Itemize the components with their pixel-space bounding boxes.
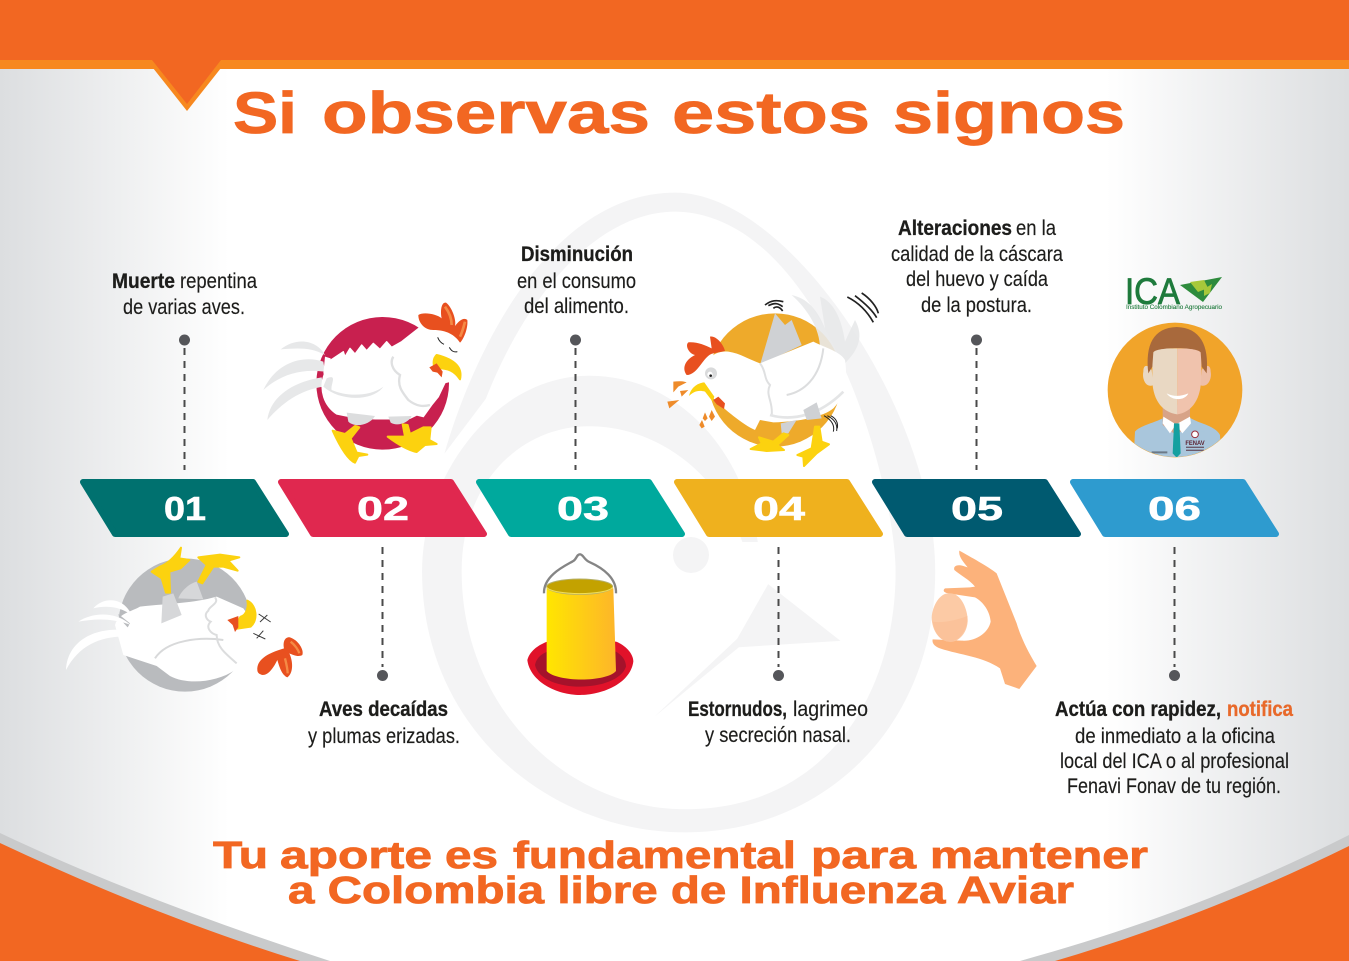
icon: hand holding egg	[932, 551, 1037, 689]
bottom right corner	[1020, 835, 1349, 961]
badge 05	[875, 482, 1078, 534]
step 06 text: Fenavi Fonav de tu región.	[1067, 775, 1281, 798]
badge 04: 04	[753, 490, 806, 527]
badge 02	[281, 482, 484, 534]
bottom left corner	[0, 833, 330, 961]
step 02 text: y plumas erizadas.	[308, 725, 460, 748]
closing message	[213, 835, 1148, 912]
badge 03: 03	[557, 490, 609, 527]
step 01 text: repentina	[180, 270, 257, 293]
step 05 text: de la postura.	[921, 294, 1032, 317]
closing message: mantener	[930, 835, 1148, 877]
step 04 text: y secreción nasal.	[705, 724, 851, 747]
badge 01: 01	[164, 490, 206, 527]
title: Si	[233, 81, 297, 146]
closing message: es	[445, 835, 498, 877]
step 02 text	[308, 698, 460, 748]
egg watermark	[422, 193, 935, 832]
step 04 text	[688, 698, 868, 747]
step 05 text: Alteraciones	[898, 217, 1012, 240]
step 05 text: en la	[1016, 217, 1056, 240]
step 02 text: Aves decaídas	[319, 698, 448, 721]
step 04 text: lagrimeo	[793, 698, 868, 721]
badge 03	[479, 482, 682, 534]
step 05 text: calidad de la cáscara	[891, 243, 1063, 266]
step 06 text: local del ICA o al profesional	[1060, 750, 1289, 773]
closing message: fundamental	[513, 835, 796, 877]
badge 05: 05	[951, 490, 1003, 527]
step 05 text	[891, 217, 1063, 317]
badge 01	[83, 482, 286, 534]
ICA logo	[1125, 271, 1223, 312]
step 01 text	[112, 270, 257, 319]
ICA logo: ICA	[1125, 271, 1180, 312]
closing message: a Colombia libre de Influenza Aviar	[288, 870, 1074, 912]
ICA logo: Instituto Colombiano Agropecuario	[1126, 305, 1223, 311]
badge 02: 02	[357, 490, 409, 527]
icon: feeder bucket	[527, 554, 633, 695]
closing message: para	[811, 835, 917, 877]
step 01 text: de varias aves.	[123, 296, 245, 319]
title	[233, 81, 1125, 146]
title: estos	[672, 81, 870, 146]
icon: sneezing chicken	[667, 293, 878, 466]
title: signos	[893, 81, 1125, 146]
icon: ICA professional avatar: FENAV	[1185, 441, 1205, 447]
step 05 text: del huevo y caída	[906, 268, 1048, 291]
title: observas	[322, 81, 650, 146]
icon: ICA professional avatar	[1108, 323, 1242, 465]
step 01 text: Muerte	[112, 270, 175, 293]
icon: drooping chicken	[263, 303, 467, 463]
step 06 text: de inmediato a la oficina	[1075, 725, 1275, 748]
step 03 text: Disminución	[521, 243, 633, 266]
badge 04	[677, 482, 880, 534]
closing message: aporte	[280, 835, 432, 877]
badge 06	[1073, 482, 1276, 534]
step 03 text: en el consumo	[517, 270, 636, 293]
top orange band	[0, 0, 1349, 111]
badge 06: 06	[1148, 490, 1201, 527]
icon: dead chicken	[66, 548, 303, 692]
step 04 text: Estornudos,	[688, 698, 787, 721]
closing message: Tu	[213, 835, 268, 877]
connector lines	[179, 334, 1180, 681]
step 06 text: Actúa con rapidez,	[1055, 698, 1221, 721]
step 03 text: del alimento.	[524, 295, 629, 318]
step 06 text	[1055, 698, 1293, 798]
step 03 text	[517, 243, 636, 318]
step 06 text: notifica	[1227, 698, 1293, 721]
